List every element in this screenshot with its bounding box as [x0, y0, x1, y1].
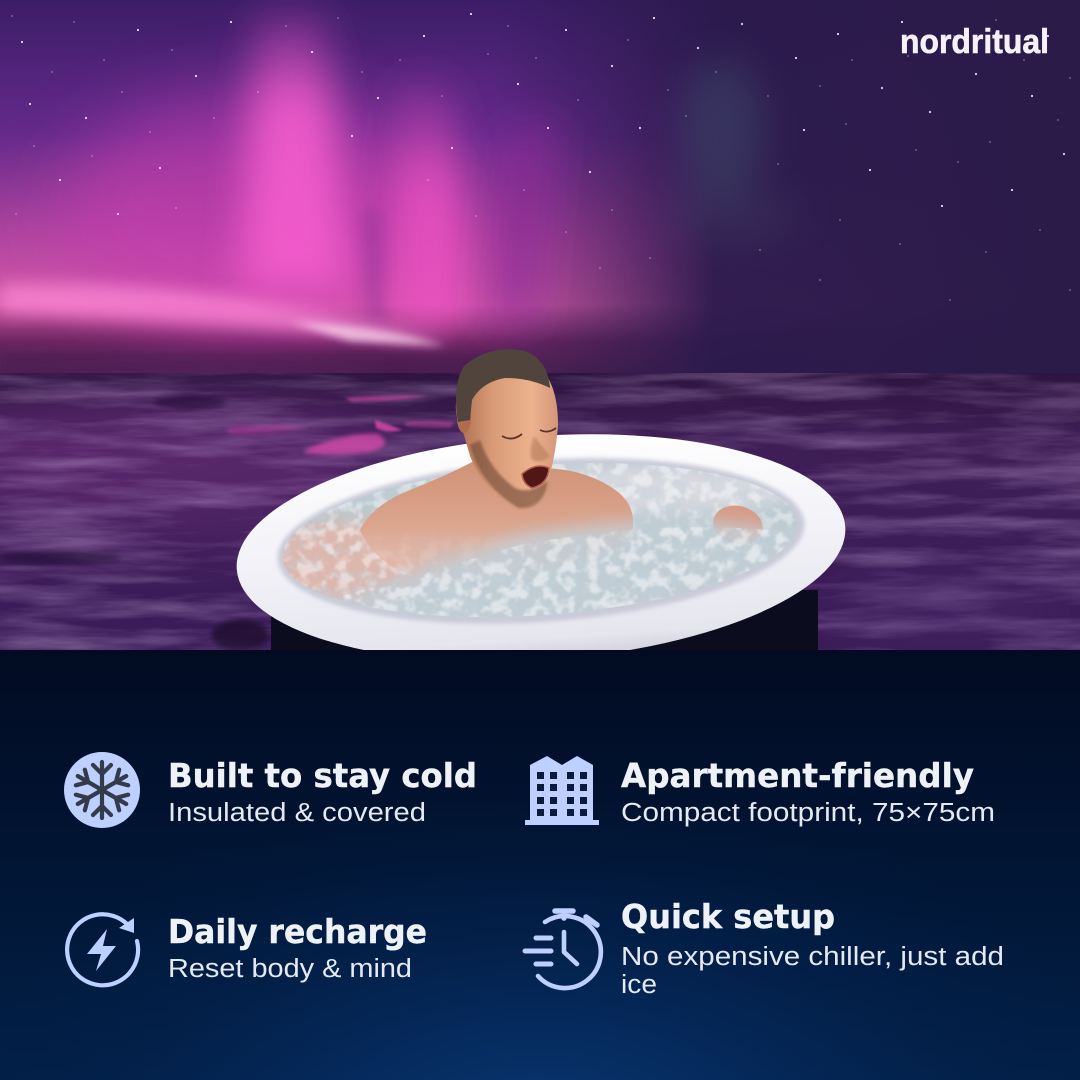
- panel: features background: [0, 650, 1080, 1080]
- ice: [282, 463, 798, 608]
- description: Insulated & covered: [168, 799, 426, 827]
- heading: Quick setup: [621, 897, 835, 936]
- icon: apartment building: [525, 756, 599, 825]
- feature: daily recharge: [67, 912, 427, 985]
- hair: [456, 349, 550, 422]
- icon: snowflake: [64, 752, 140, 828]
- feature: apartment-friendly: [525, 756, 995, 827]
- stars: [12, 14, 1070, 300]
- nose shadow: [530, 436, 550, 461]
- icon: stopwatch: [525, 911, 601, 988]
- description continued: ice: [621, 971, 657, 999]
- feature: built to stay cold: [64, 752, 477, 828]
- heading: Daily recharge: [168, 912, 427, 951]
- feature: quick setup: [525, 897, 1004, 988]
- ear: [457, 414, 471, 433]
- closed eyes: [502, 428, 556, 439]
- inflatable rim: [236, 434, 846, 650]
- logo: nordritual: [900, 23, 1049, 61]
- description: No expensive chiller, just add: [621, 943, 1004, 971]
- ice bath tub: [236, 349, 846, 650]
- open mouth: [522, 466, 549, 488]
- ice in front of the body: [330, 512, 782, 612]
- man's shoulders and chest: [360, 462, 633, 580]
- beard shadow: [470, 440, 548, 508]
- heading: Apartment-friendly: [621, 756, 974, 795]
- description: Compact footprint, 75×75cm: [621, 799, 995, 827]
- snowy ground: [0, 373, 1080, 651]
- man's hand: [713, 506, 763, 544]
- night sky: [0, 0, 1080, 380]
- aurora glow: [0, 10, 800, 385]
- description: Reset body & mind: [168, 955, 412, 983]
- pink light reflections on the snow: [225, 395, 455, 454]
- panel: aurora hero scene: [0, 0, 1080, 681]
- man's head: [456, 349, 558, 508]
- tub body: [271, 590, 818, 650]
- icon: recharge bolt: [67, 914, 138, 985]
- heading: Built to stay cold: [168, 756, 477, 795]
